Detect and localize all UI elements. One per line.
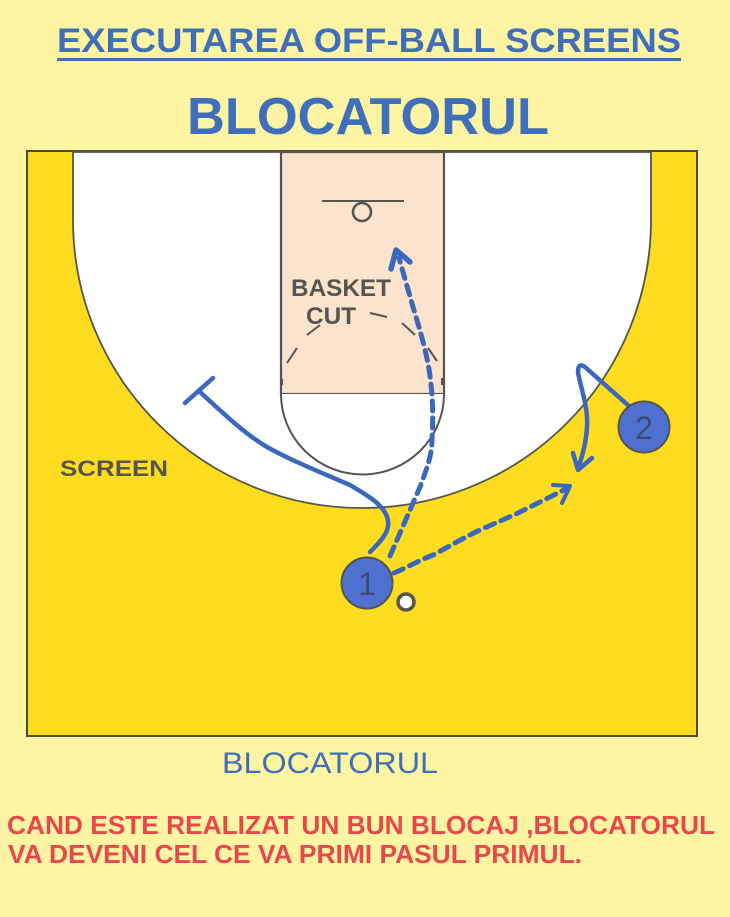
player 1: 1 <box>358 566 376 602</box>
arrow: dashed pass to player 2 side <box>394 485 570 573</box>
arrow: player 2 cut <box>573 365 630 470</box>
free-throw circle lower half <box>281 394 444 474</box>
label: basket cut <box>291 275 391 330</box>
arrow: dashed basket cut <box>390 250 433 556</box>
title: EXECUTAREA OFF-BALL SCREENS <box>57 22 681 60</box>
court floor <box>27 151 697 736</box>
red note <box>7 810 715 869</box>
label: basket cut: BASKET <box>291 275 391 302</box>
player 1 <box>342 558 392 608</box>
panel: basketball half court <box>27 151 697 736</box>
red note: VA DEVENI CEL CE VA PRIMI PASUL PRIMUL. <box>8 839 582 869</box>
player 2 <box>618 402 670 452</box>
backboard <box>322 200 404 202</box>
free-throw circle dashed upper half <box>282 313 442 385</box>
heading: blocatorul: BLOCATORUL <box>187 88 549 146</box>
caption: BLOCATORUL <box>222 747 438 780</box>
free-throw lane <box>281 152 444 394</box>
rim <box>353 203 371 221</box>
three-point area <box>73 152 651 508</box>
ball <box>398 594 414 610</box>
label: screen: SCREEN <box>60 456 168 481</box>
label: basket cut: CUT <box>306 303 356 330</box>
player 2: 2 <box>635 410 653 446</box>
red note: CAND ESTE REALIZAT UN BUN BLOCAJ ,BLOCATORUL <box>7 810 715 840</box>
arrow: screen path of player 1 <box>185 378 388 552</box>
